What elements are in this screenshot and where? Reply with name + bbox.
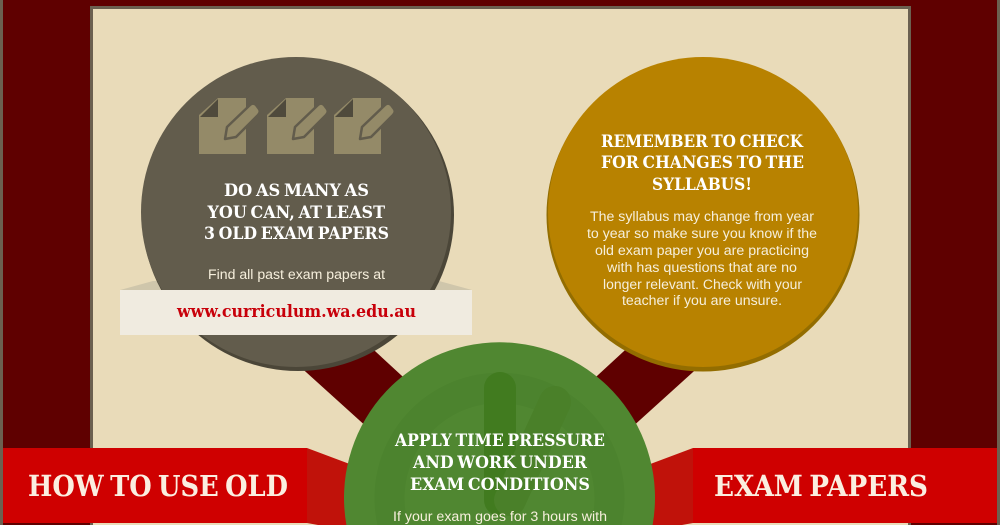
heading: apply time pressure (394, 431, 605, 495)
panel: time pressure circle (344, 342, 655, 525)
panel: syllabus circle (546, 57, 860, 372)
text: time pressure body: If your exam goes for 3 hours with (393, 509, 607, 524)
heading: do as many: DO AS MANY AS (224, 181, 369, 201)
icon: three papers with pens (199, 98, 395, 154)
ribbon: left title: HOW TO USE OLD (28, 469, 288, 503)
ribbon: right title: EXAM PAPERS (714, 469, 928, 503)
heading: do as many: YOU CAN, AT LEAST (207, 203, 385, 223)
text: syllabus body: old exam paper you are practicing (595, 243, 809, 258)
panel: old exam papers circle (141, 57, 454, 371)
text: syllabus body (587, 209, 817, 308)
ribbon: right title (693, 448, 997, 523)
text: syllabus body: The syllabus may change from year (590, 209, 815, 224)
text: syllabus body: with has questions that are no (606, 260, 797, 275)
ribbon: left title (3, 448, 307, 523)
text: find all past papers: Find all past exam papers at (208, 267, 385, 282)
heading: apply time pressure: EXAM CONDITIONS (410, 475, 590, 495)
heading: remember to check: FOR CHANGES TO THE (601, 153, 804, 173)
ribbon fold: right (645, 448, 693, 525)
heading: remember to check: REMEMBER TO CHECK (601, 132, 804, 152)
heading: apply time pressure: AND WORK UNDER (412, 453, 588, 473)
ribbon fold: left (307, 448, 355, 525)
heading: do as many: 3 OLD EXAM PAPERS (204, 224, 389, 244)
text: syllabus body: teacher if you are unsure. (622, 293, 782, 308)
heading: remember to check: SYLLABUS! (652, 175, 752, 195)
text: syllabus body: longer relevant. Check with your (603, 277, 803, 292)
icon: clock (374, 373, 624, 525)
connector arms (265, 316, 734, 457)
heading: apply time pressure: APPLY TIME PRESSURE (394, 431, 605, 451)
banner back fold (120, 281, 472, 290)
heading: do as many (204, 181, 389, 244)
text: syllabus body: to year so make sure you know if the (587, 226, 817, 241)
url banner: www.curriculum.wa.edu.au (176, 302, 416, 322)
heading: remember to check (601, 132, 804, 195)
url banner (120, 290, 472, 335)
